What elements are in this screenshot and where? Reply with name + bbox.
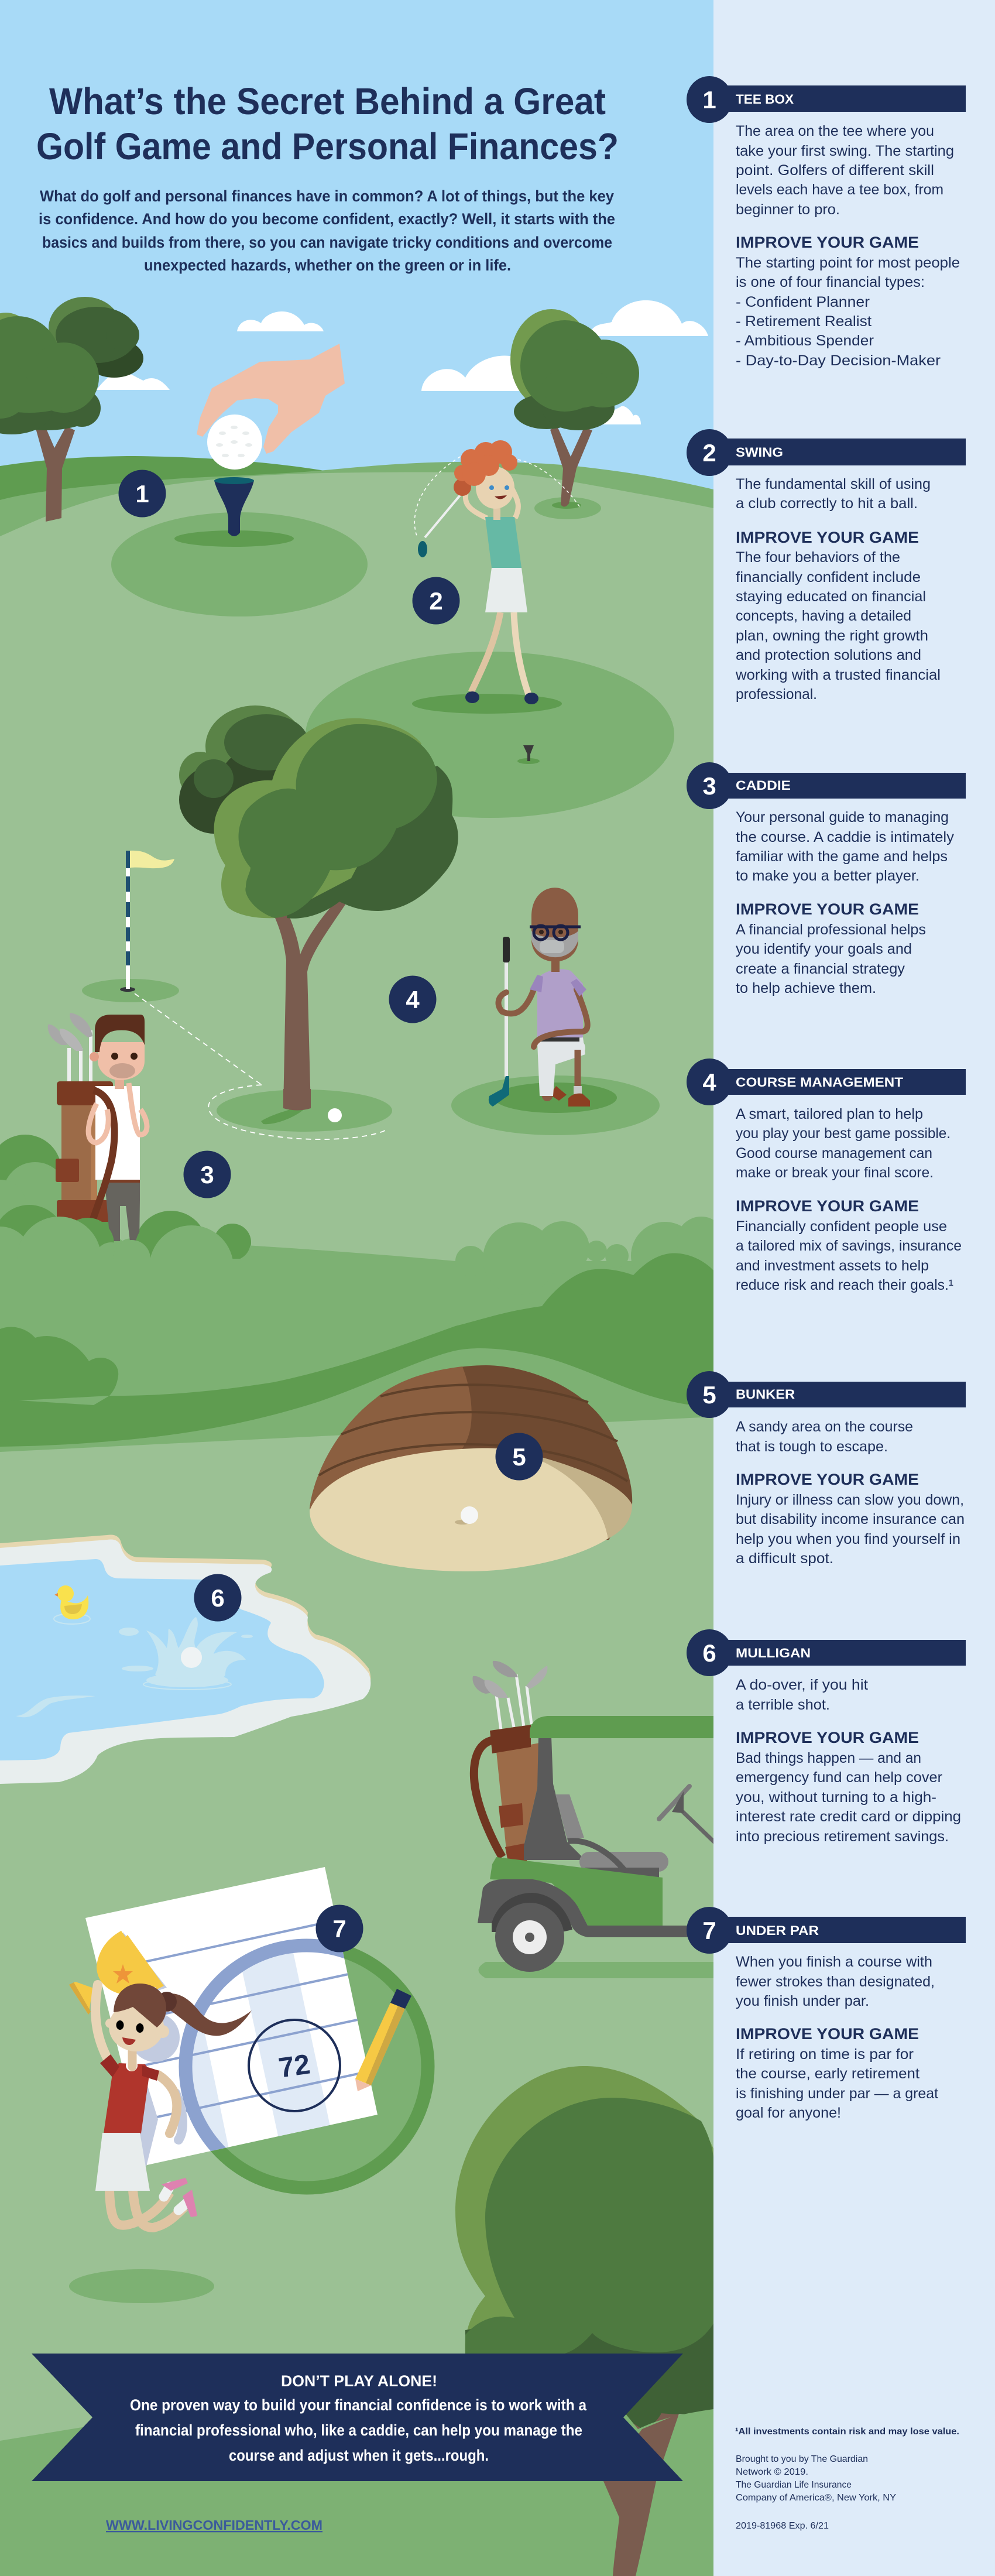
badge 2: [412, 577, 460, 624]
fairway band with bushes: [0, 1135, 726, 1452]
badge 3: 3: [200, 1161, 214, 1188]
dark bushes behind: [0, 1135, 251, 1283]
panel: 6 mulligan: you, without turning to a high-: [736, 1789, 936, 1806]
fender: [478, 1879, 691, 1937]
panel: 7 under par: you finish under par.: [736, 1993, 869, 2009]
panel: 1 tee box: - Day-to-Day Decision-Maker: [736, 352, 941, 369]
panel: 4 course management: COURSE MANAGEMENT: [736, 1075, 904, 1090]
intro paragraph: unexpected hazards, whether on the green or in life.: [144, 256, 511, 274]
character: financial professional kneeling with club: [451, 888, 660, 1135]
panel: 7 under par: 7: [702, 1917, 716, 1944]
panel: 1 tee box: The area on the tee where you: [736, 123, 934, 139]
panel: 6 mulligan: a terrible shot.: [736, 1697, 830, 1713]
pants: [105, 1182, 140, 1241]
panel: 4 course management: and investment assets to help: [736, 1258, 929, 1274]
tee: [214, 481, 254, 536]
shoes: [162, 2178, 188, 2191]
shirt: [104, 2063, 150, 2133]
ponytail: [163, 1993, 252, 2036]
panel: 7 under par: goal for anyone!: [736, 2105, 841, 2121]
head: [109, 2002, 164, 2051]
intro paragraph: is confidence. And how do you become confident, exactly? Well, it starts with the: [39, 210, 615, 228]
pencil: [355, 2003, 405, 2085]
bunker: [310, 1365, 632, 1571]
mid green band: [0, 1245, 713, 1452]
panel: 2 swing: professional.: [736, 686, 817, 703]
front leg: [575, 1050, 581, 1089]
panel: 3 caddie: to help achieve them.: [736, 980, 876, 996]
character: jumping girl with trophy: [69, 1931, 252, 2228]
panel: 4 course management: A smart, tailored plan to help: [736, 1106, 923, 1122]
bottom trunk foreground: [603, 2414, 679, 2576]
hair: [114, 1984, 166, 2027]
arms: [88, 1104, 108, 1143]
main canopy: [239, 724, 437, 918]
hair: [454, 440, 517, 486]
intro paragraph: [39, 187, 615, 274]
shadow on paper: [123, 1932, 183, 2166]
left dark bush: [0, 1327, 118, 1402]
strap: [474, 1740, 502, 1857]
panel: 2 swing: plan, owning the right growth: [736, 628, 928, 644]
dark right canopy: [287, 766, 458, 919]
lens off paper: [186, 1945, 428, 2188]
seat back: [555, 1794, 584, 1839]
panel: 1 tee box: point. Golfers of different skill: [736, 162, 934, 179]
main fairway: light green: [0, 472, 713, 2576]
steering: [659, 1786, 714, 1842]
badge 6: 6: [211, 1584, 225, 1612]
mid bushes: [0, 1162, 234, 1310]
shadow: [479, 1962, 714, 1978]
badge 5: 5: [512, 1443, 526, 1471]
panel: 5 bunker: Injury or illness can slow you down,: [736, 1492, 964, 1508]
clubs: [69, 1030, 91, 1083]
panel: 7 under par: IMPROVE YOUR GAME: [736, 2025, 919, 2043]
green body: [490, 1857, 663, 1926]
badge 5: [495, 1433, 543, 1480]
footnote and credits: ¹All investments contain risk and may lose value.: [735, 2427, 959, 2437]
panel: 6 mulligan: Bad things happen — and an: [736, 1750, 921, 1766]
score circle: [249, 2020, 340, 2111]
panel: 2 swing: The four behaviors of the: [736, 549, 900, 566]
flag and pin: [82, 851, 179, 1002]
panel: 7 under par: [687, 1907, 966, 2121]
trunk: [603, 2395, 685, 2576]
panel: 1 tee box: beginner to pro.: [736, 201, 840, 218]
panel: 3 caddie: the course. A caddie is intimately: [736, 829, 955, 845]
strap: [92, 1090, 115, 1221]
legs: [109, 2191, 170, 2225]
panel: 2 swing: The fundamental skill of using: [736, 476, 931, 492]
badge 7 scene: [316, 1905, 363, 1952]
panel: 6 mulligan: A do-over, if you hit: [736, 1677, 868, 1693]
sky background: [0, 0, 713, 585]
panel: 1 tee box: levels each have a tee box, from: [736, 181, 943, 198]
pants: [537, 1037, 585, 1096]
roof: [530, 1716, 714, 1738]
panel: 4 course management: [687, 1059, 966, 1293]
glasses: [530, 926, 581, 940]
big center tree: [179, 705, 458, 1110]
lens stripes: [192, 1953, 330, 2148]
panel: 2 swing: financially confident include: [736, 569, 921, 585]
callout banner: don't play alone: course and adjust when it gets...rough.: [229, 2447, 489, 2464]
tee box greens: [111, 512, 368, 616]
main canopy: [465, 2098, 714, 2354]
skirt: [95, 2133, 150, 2191]
title: [36, 80, 619, 167]
club: [425, 495, 460, 537]
clouds: [97, 300, 708, 424]
panel: 2 swing: staying educated on financial: [736, 588, 926, 605]
title: What’s the Secret Behind a Great: [49, 80, 606, 122]
footnote and credits: Brought to you by The Guardian: [736, 2454, 868, 2464]
neck: [126, 2060, 138, 2071]
neck and head: [551, 960, 560, 972]
lens ring on paper: [179, 1939, 344, 2151]
water streak: [16, 1695, 95, 1717]
back hill: mid green: [0, 462, 713, 585]
panel: 1 tee box: [687, 76, 966, 369]
footnote and credits: Network © 2019.: [736, 2467, 808, 2477]
panel: 5 bunker: 5: [702, 1381, 716, 1409]
badge 3: [184, 1151, 231, 1198]
arms: [465, 489, 487, 518]
panel: 1 tee box: TEE BOX: [736, 92, 794, 107]
panel: 3 caddie: A financial professional helps: [736, 922, 926, 938]
right mid bushes: [455, 1217, 726, 1295]
clubs: [496, 1674, 531, 1730]
panel: 1 tee box: take your first swing. The starting: [736, 143, 954, 159]
dark green sweep: [0, 1253, 713, 1447]
badge 1: [118, 470, 166, 518]
back canopy: [205, 705, 305, 787]
panel: 7 under par: is finishing under par — a great: [736, 2085, 938, 2102]
panel: 3 caddie: familiar with the game and helps: [736, 848, 948, 865]
seat: [579, 1852, 668, 1872]
rubber duck: [54, 1585, 90, 1624]
panel: 1 tee box: IMPROVE YOUR GAME: [736, 234, 919, 251]
golf cart with bag: [472, 1661, 714, 1978]
panel: 7 under par: fewer strokes than designated,: [736, 1974, 935, 1990]
ground shadow under jumping girl: [69, 2269, 214, 2303]
panel: 2 swing: a club correctly to hit a ball.: [736, 495, 918, 512]
panel: 3 caddie: you identify your goals and: [736, 941, 912, 957]
top: [485, 517, 521, 568]
panel: 2 swing: 2: [702, 439, 716, 467]
panel: 6 mulligan: MULLIGAN: [736, 1646, 811, 1660]
panel: 2 swing: concepts, having a detailed: [736, 608, 911, 624]
hand: [197, 344, 345, 454]
panel: 4 course management: IMPROVE YOUR GAME: [736, 1197, 919, 1215]
panel: 5 bunker: A sandy area on the course: [736, 1419, 913, 1435]
panel: 2 swing: and protection solutions and: [736, 647, 921, 663]
badge 2: 2: [429, 587, 443, 615]
paper lines: [143, 1923, 358, 2118]
trophy: [97, 1931, 160, 1994]
panel: 5 bunker: that is tough to escape.: [736, 1438, 888, 1455]
sand: [310, 1448, 608, 1571]
panel: 1 tee box: - Confident Planner: [736, 294, 870, 310]
trunk: [273, 899, 345, 1110]
panel: 5 bunker: a difficult spot.: [736, 1550, 833, 1567]
olive canopy: [214, 718, 421, 918]
panel: 4 course management: you play your best game possible.: [736, 1125, 951, 1142]
splash ball: [181, 1647, 202, 1668]
panel: 4 course management: reduce risk and reach their goals.¹: [736, 1277, 953, 1293]
footnote and credits: 2019-81968 Exp. 6/21: [736, 2521, 829, 2531]
rim: [0, 1539, 370, 1784]
other arm: [158, 2075, 177, 2133]
arms: [499, 989, 534, 1013]
footnote and credits: Company of America®, New York, NY: [736, 2493, 896, 2503]
shirt: [95, 1086, 140, 1180]
foreground bushes covering caddie: [0, 1205, 251, 1402]
footnote and credits: The Guardian Life Insurance: [736, 2480, 852, 2490]
icon: hand placing ball on tee: [197, 344, 345, 536]
panel: 5 bunker: [687, 1371, 966, 1567]
panel: 3 caddie: to make you a better player.: [736, 868, 919, 884]
tree: top left: [0, 297, 143, 522]
panel: 2 swing: SWING: [736, 445, 783, 460]
legs: [471, 612, 500, 692]
callout banner: don't play alone: [32, 2354, 683, 2481]
panel: 6 mulligan: emergency fund can help cover: [736, 1769, 942, 1786]
panel: 5 bunker: BUNKER: [736, 1387, 795, 1402]
splash: [119, 1617, 253, 1687]
shirt: [537, 969, 583, 1041]
wheel: [495, 1903, 564, 1972]
bag: [61, 1095, 97, 1222]
panel: 7 under par: the course, early retirement: [736, 2065, 919, 2082]
pond: [0, 1534, 370, 1784]
callout banner: don't play alone: DON’T PLAY ALONE!: [281, 2372, 437, 2390]
green around big tree with ball: [135, 994, 392, 1139]
panel: 2 swing: IMPROVE YOUR GAME: [736, 529, 919, 546]
scorecard and magnifying glass: [85, 1867, 428, 2188]
panel: 2 swing: [687, 429, 966, 703]
website link: WWW.LIVINGCONFIDENTLY.COM: [106, 2517, 322, 2533]
panel: 5 bunker: but disability income insurance can: [736, 1511, 965, 1527]
panel: 1 tee box: 1: [702, 86, 716, 114]
badge 1: 1: [135, 480, 149, 508]
shoes: [465, 691, 479, 703]
bag: [496, 1743, 540, 1850]
character: caddie with golf bag: [48, 1013, 147, 1241]
badge 4 scene: 4: [406, 986, 420, 1013]
right panel background: [713, 0, 995, 2576]
socks: [164, 2187, 170, 2197]
back leg and shoes: [550, 1086, 567, 1101]
back hill: dark green: [0, 456, 328, 556]
panel: 4 course management: Financially confident people use: [736, 1218, 947, 1235]
panel: 6 mulligan: IMPROVE YOUR GAME: [736, 1729, 919, 1746]
club: [505, 962, 508, 1077]
intro paragraph: basics and builds from there, so you can navigate tricky conditions and overcome: [42, 234, 612, 251]
eyes and mouth: [116, 2020, 124, 2030]
sand shadow: [515, 1451, 632, 1539]
badge 4 scene: [389, 975, 437, 1023]
panel: 7 under par: If retiring on time is par for: [736, 2046, 914, 2063]
panel: 1 tee box: The starting point for most people: [736, 255, 960, 271]
panel: 4 course management: a tailored mix of savings, insurance: [736, 1238, 962, 1254]
panel: 3 caddie: create a financial strategy: [736, 961, 905, 977]
scorecard and magnifying glass: 72: [277, 2049, 312, 2084]
panel: 1 tee box: - Ambitious Spender: [736, 333, 874, 349]
panel: 2 swing: working with a trusted financial: [735, 667, 941, 683]
panel: 4 course management: Good course management can: [736, 1145, 932, 1162]
panel: 5 bunker: help you when you find yourself in: [736, 1531, 960, 1547]
panel: 4 course management: 4: [702, 1068, 716, 1096]
panel: 6 mulligan: 6: [702, 1639, 716, 1667]
badge 7 scene: 7: [332, 1915, 346, 1943]
small tee: [517, 745, 540, 764]
raised arm: [95, 1985, 107, 2058]
ball in bunker: [455, 1520, 470, 1525]
panel: 3 caddie: Your personal guide to managing: [736, 809, 949, 825]
panel: 3 caddie: [687, 762, 966, 996]
post: [524, 1736, 585, 1860]
head: [493, 503, 500, 520]
panel: 5 bunker: IMPROVE YOUR GAME: [736, 1471, 919, 1488]
swing arc: [414, 454, 465, 536]
water: [0, 1559, 324, 1760]
callout banner: don't play alone: financial professional who, like a caddie, can help you manage the: [135, 2421, 582, 2439]
swing green: [306, 652, 674, 818]
panel: 6 mulligan: [687, 1629, 966, 1845]
panel: 6 mulligan: interest rate credit card or dipping: [736, 1808, 961, 1825]
panel: 7 under par: When you finish a course with: [736, 1954, 932, 1970]
panel: 3 caddie: CADDIE: [736, 778, 791, 793]
panel: 6 mulligan: into precious retirement savings.: [736, 1828, 949, 1845]
badge 6: [194, 1574, 241, 1622]
panel: 3 caddie: IMPROVE YOUR GAME: [736, 900, 919, 918]
panel: 3 caddie: 3: [702, 772, 716, 800]
bottom tree: [455, 2066, 714, 2576]
title: Golf Game and Personal Finances?: [36, 125, 619, 167]
olive canopy: [455, 2066, 714, 2409]
panel: 1 tee box: is one of four financial types:: [736, 274, 925, 290]
skirt: [485, 568, 527, 612]
face: [489, 485, 494, 490]
character: woman golfer swinging: [414, 440, 581, 704]
panel: 4 course management: make or break your final score.: [736, 1164, 934, 1181]
panel: 7 under par: UNDER PAR: [736, 1923, 819, 1938]
tree: top right: [510, 309, 639, 519]
footnote and credits: [735, 2427, 959, 2531]
golf ball: [207, 415, 262, 470]
paper: [85, 1867, 378, 2165]
panel: 1 tee box: - Retirement Realist: [736, 313, 872, 330]
intro paragraph: What do golf and personal finances have in common? A lot of things, but the key: [40, 187, 614, 205]
sand bank: [0, 1534, 370, 1779]
neck: [115, 1074, 124, 1089]
callout banner: don't play alone: One proven way to build your financial confidence is to work with a: [130, 2396, 587, 2414]
dark canopy: [465, 2283, 714, 2429]
bottom hill: [0, 2400, 713, 2576]
trunk: [34, 419, 75, 522]
head: [98, 1042, 145, 1080]
